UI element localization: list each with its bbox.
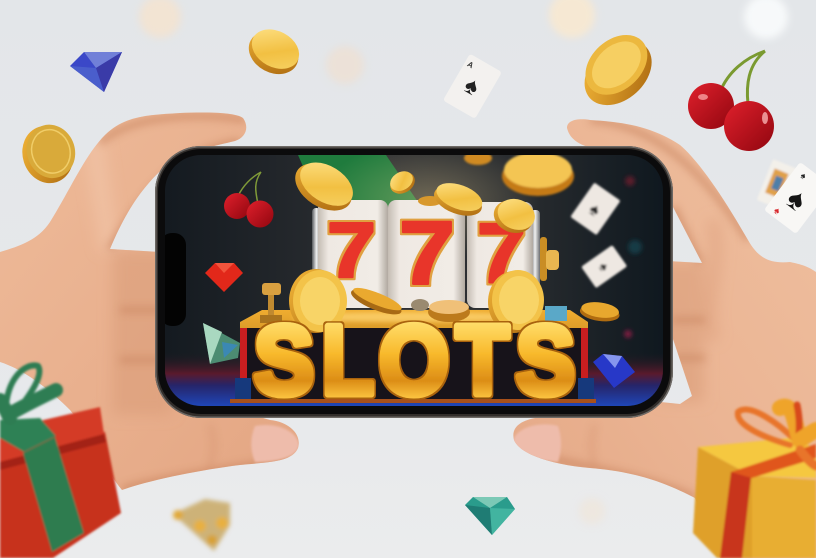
floating coin top centre	[241, 21, 307, 83]
sevens: 7	[327, 206, 376, 294]
flat coin centre	[428, 300, 470, 322]
tilted coin	[351, 288, 402, 314]
blue gem on screen	[593, 354, 635, 388]
box shadow edge	[0, 434, 106, 470]
right hand	[505, 100, 816, 558]
large left coin	[289, 269, 347, 333]
blurred coin top right	[502, 152, 574, 196]
floating teal gem	[465, 497, 515, 535]
right hand edge shading	[520, 120, 748, 498]
playing cards right: ♠	[771, 205, 783, 218]
box right face	[752, 476, 816, 558]
blurred screen cards	[570, 182, 627, 288]
slots title: S	[516, 305, 575, 415]
right chrome and gold knob	[533, 210, 559, 284]
box lid	[0, 407, 104, 462]
slots title: O	[379, 305, 449, 415]
playing cards right	[757, 159, 816, 234]
floating playing card: A	[466, 60, 475, 70]
small flat coin right	[580, 302, 620, 322]
red ribbon	[720, 468, 752, 558]
green ribbon	[23, 437, 84, 552]
playing cards right: ♠	[799, 170, 809, 181]
small coin	[390, 171, 415, 194]
slot machine base	[230, 306, 596, 403]
phone	[155, 140, 673, 418]
blurred screen cards: ♠	[585, 199, 605, 221]
floating playing card: ♠	[459, 72, 484, 101]
right thumb nail	[513, 424, 561, 462]
floor glow	[165, 358, 663, 406]
left thumb nail	[251, 425, 299, 462]
lever	[260, 283, 282, 323]
screen glow	[344, 155, 526, 248]
reel coin small	[418, 196, 440, 206]
notch	[165, 233, 186, 326]
top edge coin	[464, 151, 492, 165]
box left face	[693, 447, 752, 558]
phone screen	[160, 140, 663, 415]
screen cherries	[224, 172, 274, 228]
playing cards right: ♠	[780, 182, 813, 218]
blurred gold gem	[173, 499, 230, 551]
slots title: T	[456, 305, 509, 415]
sevens	[327, 218, 526, 287]
right fingers shading	[673, 226, 720, 404]
sevens: 7	[399, 204, 455, 304]
pink bokeh	[624, 176, 642, 338]
floating blue gem	[70, 52, 122, 92]
slots title: S	[254, 305, 314, 415]
left hand edge shading	[100, 116, 290, 490]
green bow	[0, 365, 56, 418]
left fingers shading	[88, 142, 167, 411]
clear gem	[203, 323, 240, 364]
orange bow	[738, 405, 816, 466]
red gem	[205, 263, 243, 292]
reels	[318, 200, 533, 308]
large right coin	[488, 270, 544, 333]
left hand	[0, 100, 310, 500]
coin top left	[295, 162, 353, 211]
slots title	[252, 320, 576, 400]
blurred screen cards: ♠	[595, 259, 613, 275]
big cherries	[688, 51, 774, 151]
reel coin middle	[434, 183, 482, 216]
green wedge	[298, 155, 420, 210]
box lid	[698, 438, 816, 478]
red gift box	[0, 365, 121, 558]
floating coin top right	[568, 23, 665, 118]
floating playing card	[443, 54, 502, 119]
yellow gift box	[693, 405, 816, 558]
slots title: L	[322, 305, 374, 415]
reel coin right	[494, 198, 535, 233]
sevens: 7	[477, 206, 526, 300]
floating coin top left	[15, 118, 83, 190]
silver coin	[411, 299, 429, 311]
box front	[0, 432, 121, 558]
left chrome	[312, 208, 318, 270]
bokeh lights	[139, 0, 788, 524]
phone body	[155, 146, 673, 418]
